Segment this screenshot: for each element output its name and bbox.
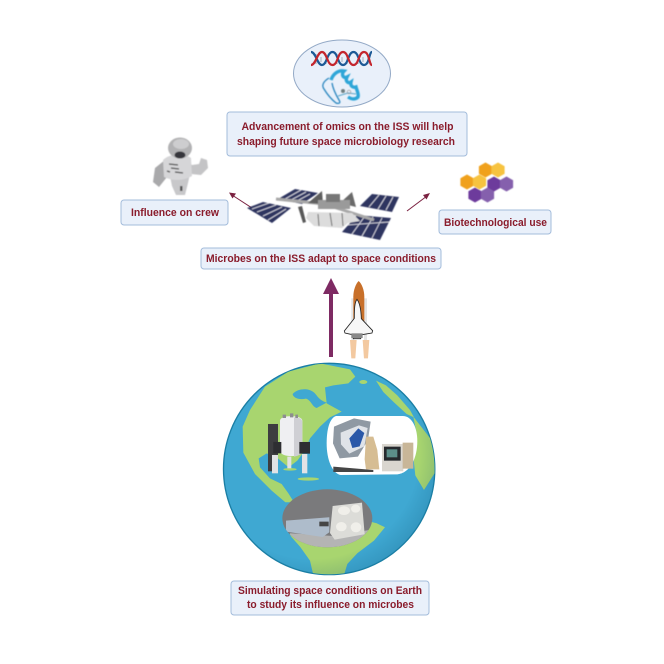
text box: influence on crew: Influence on crew	[131, 207, 219, 219]
text box: biotechnological use	[439, 210, 551, 234]
earth	[223, 363, 437, 575]
random positioning machine	[333, 418, 371, 458]
arrow: Earth to ISS	[323, 278, 339, 357]
panel: cryostat photo	[268, 413, 310, 473]
text box: simulating space conditions: to study its influence on microbes	[247, 599, 414, 611]
icon: astronaut	[153, 138, 208, 195]
Greenland	[376, 381, 414, 417]
globe with simulators	[223, 363, 437, 575]
truss and modules	[276, 199, 374, 220]
Africa edge	[413, 417, 437, 490]
arrow: ISS to crew	[229, 192, 255, 210]
infographic diagram	[120, 40, 552, 616]
panel: microgravity device photo	[282, 489, 373, 549]
arrow: ISS to biotechnology	[407, 193, 430, 211]
icon: DNA helix	[311, 52, 372, 65]
text box: microbes adapt: Microbes on the ISS adapt to space conditions	[206, 253, 436, 265]
text box: simulating space conditions: Simulating space conditions on Earth	[238, 585, 422, 597]
text box: biotechnological use: Biotechnological use	[444, 217, 547, 229]
controller box	[286, 517, 329, 537]
hudson bay	[293, 389, 327, 408]
icon: space shuttle	[344, 281, 373, 358]
text box: microbes adapt	[201, 248, 441, 269]
panel: gimbal and monitor photo	[327, 416, 417, 475]
icon: hexagon molecules	[460, 162, 513, 202]
culture plate	[330, 503, 365, 540]
monitor device	[382, 444, 403, 471]
omics ellipse icon	[294, 40, 390, 107]
North America	[243, 363, 355, 502]
text box: advancement of omics	[227, 112, 467, 156]
text box: influence on crew	[121, 200, 228, 225]
orbiter	[344, 299, 373, 339]
solar arrays	[247, 189, 399, 240]
islands	[359, 380, 367, 384]
South America	[290, 522, 385, 574]
shadow	[224, 364, 434, 574]
rocket flames	[350, 340, 369, 358]
text box: advancement of omics: Advancement of omics on the ISS will help	[242, 121, 454, 133]
boosters	[351, 298, 354, 340]
text box: simulating space conditions	[231, 581, 429, 615]
external tank	[353, 281, 364, 322]
icon: International Space Station	[247, 189, 399, 240]
text box: advancement of omics: shaping future space microbiology research	[237, 136, 455, 148]
icon: protein structure	[323, 71, 358, 103]
